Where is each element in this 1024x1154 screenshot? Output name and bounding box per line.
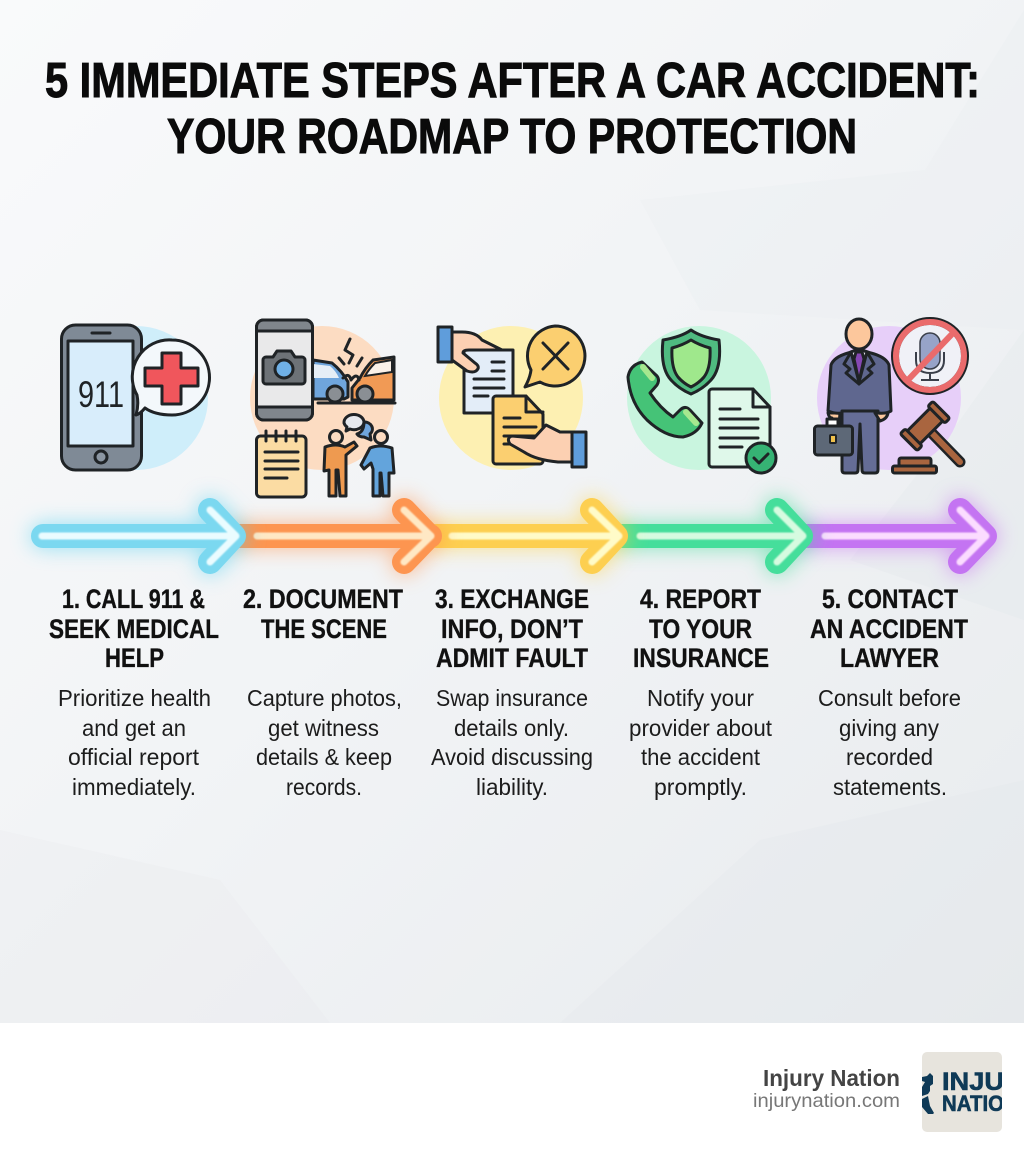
step 4 heading: TO YOUR bbox=[649, 614, 752, 644]
icon: document the scene bbox=[250, 320, 395, 497]
step 1 description: official report bbox=[68, 744, 199, 770]
step 4 text bbox=[629, 584, 772, 800]
step 3 description: Swap insurance bbox=[436, 685, 588, 711]
logo bbox=[922, 1052, 1004, 1132]
icon: accident lawyer with muted microphone and gavel bbox=[814, 319, 965, 473]
arrow: 5 purple bbox=[805, 510, 986, 562]
icon: phone calling 911 with medical cross bbox=[62, 325, 210, 470]
icon: exchange information documents bbox=[438, 326, 586, 470]
step 5 heading: 5. CONTACT bbox=[822, 584, 958, 614]
step 5 heading bbox=[810, 584, 968, 673]
step 5 description bbox=[818, 685, 961, 800]
step 4 description: promptly. bbox=[654, 774, 747, 800]
arrow: 1 blue bbox=[42, 510, 236, 562]
footer brand text: injurynation.com bbox=[753, 1090, 900, 1112]
icon: insurance phone, shield and document bbox=[627, 326, 776, 473]
step 3 heading bbox=[435, 584, 589, 673]
step 1 description: immediately. bbox=[72, 774, 196, 800]
step 3 heading: 3. EXCHANGE bbox=[435, 584, 589, 614]
title: YOUR ROADMAP TO PROTECTION bbox=[167, 110, 857, 164]
step 3 description: liability. bbox=[476, 774, 548, 800]
arrow: 3 yellow bbox=[436, 510, 619, 562]
footer bar bbox=[0, 1023, 1024, 1154]
step 1 description: Prioritize health bbox=[58, 685, 211, 711]
step 5 description: giving any bbox=[839, 715, 939, 741]
step 1 heading: SEEK MEDICAL bbox=[49, 614, 219, 644]
step 2 heading: 2. DOCUMENT bbox=[243, 584, 403, 614]
step 3 description: details only. bbox=[454, 715, 569, 741]
footer brand text bbox=[753, 1065, 900, 1112]
step 4 description bbox=[629, 685, 772, 800]
step 3 text bbox=[431, 584, 593, 800]
orange car bbox=[352, 357, 394, 400]
step 2 description: get witness bbox=[268, 715, 379, 741]
step 4 heading: 4. REPORT bbox=[640, 584, 761, 614]
logo: INJU bbox=[942, 1068, 1004, 1096]
step 5 heading: LAWYER bbox=[840, 643, 939, 673]
step 1 text bbox=[49, 584, 219, 800]
step 4 heading bbox=[633, 584, 769, 673]
step 4 description: the accident bbox=[641, 744, 760, 770]
step 4 heading: INSURANCE bbox=[633, 643, 769, 673]
step 4 description: Notify your bbox=[647, 685, 754, 711]
step 3 heading: ADMIT FAULT bbox=[436, 643, 588, 673]
icon: phone calling 911 with medical cross: 911 bbox=[78, 374, 124, 415]
step 5 heading: AN ACCIDENT bbox=[810, 614, 968, 644]
step 2 description: details & keep bbox=[256, 744, 392, 770]
step 1 heading bbox=[49, 584, 219, 673]
step 2 description: records. bbox=[286, 774, 362, 800]
footer brand text: Injury Nation bbox=[763, 1065, 900, 1091]
step 5 description: statements. bbox=[833, 774, 947, 800]
step 5 text bbox=[810, 584, 968, 800]
step 1 description bbox=[58, 685, 211, 800]
blue car bbox=[313, 360, 348, 399]
step 3 description bbox=[431, 685, 593, 800]
step 4 description: provider about bbox=[629, 715, 772, 741]
witnesses bbox=[330, 430, 342, 444]
title bbox=[45, 54, 980, 164]
step 3 heading: INFO, DON’T bbox=[441, 614, 583, 644]
arrow: 2 orange bbox=[240, 510, 431, 562]
step 1 heading: 1. CALL 911 & bbox=[62, 584, 205, 614]
step 3 description: Avoid discussing bbox=[431, 744, 593, 770]
step 5 description: recorded bbox=[846, 744, 933, 770]
step 2 text bbox=[243, 584, 403, 800]
step 1 heading: HELP bbox=[105, 643, 164, 673]
logo: NATIO bbox=[942, 1091, 1004, 1116]
step 2 description: Capture photos, bbox=[247, 685, 402, 711]
step 2 description bbox=[247, 685, 402, 800]
notepad bbox=[256, 436, 306, 497]
step 2 heading bbox=[243, 584, 403, 644]
step 2 heading: THE SCENE bbox=[261, 614, 387, 644]
step 1 description: and get an bbox=[82, 715, 186, 741]
step 5 description: Consult before bbox=[818, 685, 961, 711]
arrow: 4 green bbox=[622, 510, 803, 562]
